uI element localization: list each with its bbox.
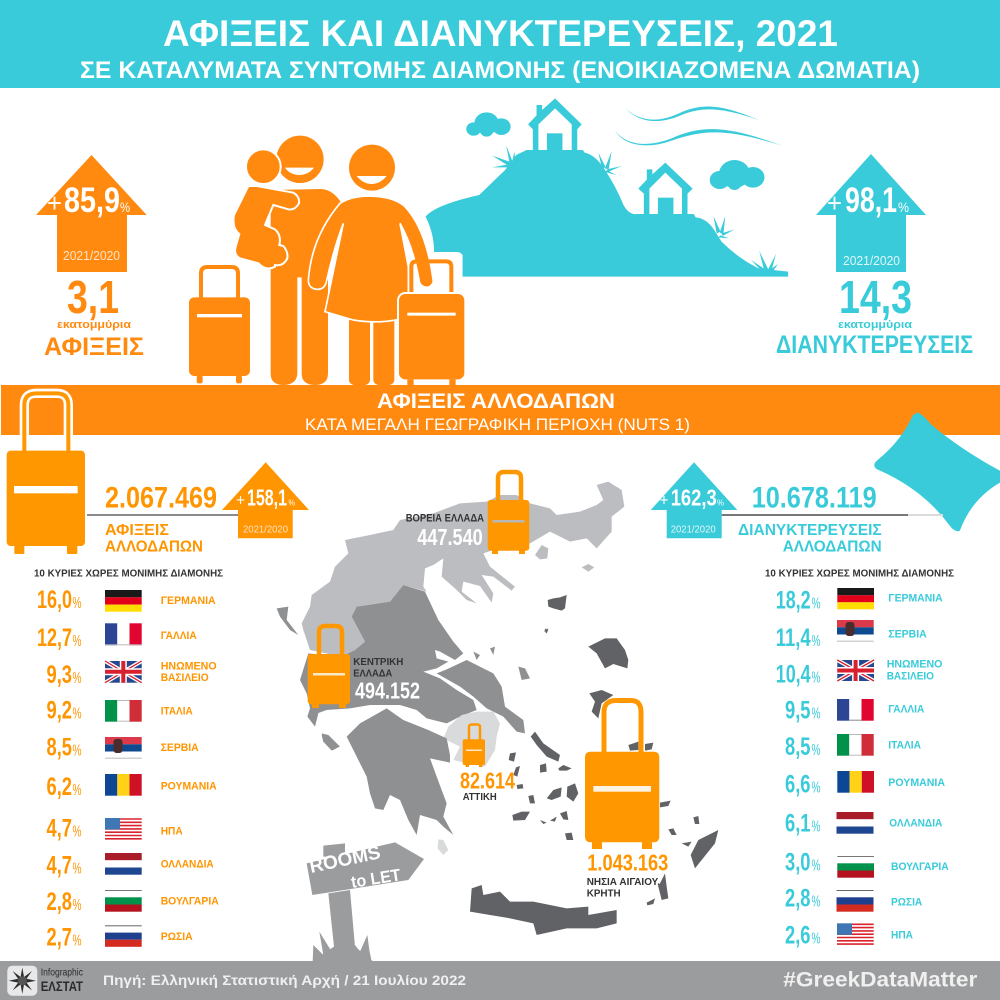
region label: Aegean islands and Crete: ΝΗΣΙΑ ΑΙΓΑΙΟΥ, [587, 876, 660, 888]
region label: central Greece [308, 626, 420, 708]
region label: northern Greece: ΒΟΡΕΙΑ ΕΛΛΑΔΑ [406, 513, 484, 525]
band: foreign arrivals heading [1, 385, 1000, 435]
row: Netherlands [46, 851, 214, 879]
icon: large suitcase [7, 393, 85, 554]
row: Germany: 18,2 [776, 586, 811, 614]
icon: upper house [528, 98, 582, 151]
row: Netherlands: 6,1 [785, 810, 811, 838]
row: Serbia: 11,4 [776, 624, 811, 652]
band: foreign arrivals heading: ΑΦΙΞΕΙΣ ΑΛΛΟΔΑΠΩΝ [377, 390, 615, 413]
arrow: foreign overnight stays change: 162,3 [671, 485, 717, 511]
row: France: ΓΑΛΛΙΑ [161, 630, 197, 642]
row: Romania [46, 773, 217, 801]
row: Italy: ΙΤΑΛΙΑ [161, 705, 193, 717]
row: Romania: ΡΟΥΜΑΝΙΑ [888, 777, 945, 789]
arrivals figure: 3,1 [67, 271, 119, 323]
icon: small cloud [466, 112, 511, 137]
row: USA [785, 921, 913, 949]
row: Bulgaria: 2,8 [46, 888, 72, 916]
row: USA: % [812, 930, 820, 947]
map regions upper [277, 482, 628, 750]
row: Romania: ΡΟΥΜΑΝΙΑ [161, 780, 217, 792]
illustration: hills with houses [426, 98, 788, 277]
row: Romania: 6,2 [46, 773, 72, 801]
row: United Kingdom [46, 660, 217, 689]
signpost: rooms to let: to LET [350, 865, 403, 892]
icon: suitcase central [308, 626, 350, 708]
row: United Kingdom: 10,4 [776, 661, 811, 689]
row: Russia: ΡΩΣΙΑ [891, 897, 922, 909]
arrivals label: ΑΦΙΞΕΙΣ [44, 333, 144, 361]
icon: grass tufts [492, 145, 778, 272]
arrow: foreign overnight stays change: 2021/2020 [671, 524, 716, 536]
icon: left suitcase [189, 267, 250, 383]
row: United Kingdom: ΗΝΩΜΕΝΟ [887, 658, 943, 670]
row: Bulgaria: ΒΟΥΛΓΑΡΙΑ [891, 861, 949, 873]
arrow: arrivals change [36, 155, 147, 272]
arrivals unit: εκατομμύρια [57, 319, 131, 331]
arrow: foreign arrivals change: 158,1 [247, 485, 287, 511]
subtitle: ΣΕ ΚΑΤΑΛΥΜΑΤΑ ΣΥΝΤΟΜΗΣ ΔΙΑΜΟΝΗΣ (ΕΝΟΙΚΙΑΖΟΜΕΝΑ ΔΩΜΑΤΙΑ) [80, 57, 920, 84]
foreign arrivals label: ΑΛΛΟΔΑΠΩΝ [105, 539, 203, 556]
row: Germany: % [812, 595, 820, 612]
region: Peloponnese [347, 708, 453, 835]
row: France: 9,5 [785, 696, 811, 724]
logo wordmark: Infographic [41, 968, 83, 979]
row: USA [46, 815, 183, 843]
title: ΑΦΙΞΕΙΣ ΚΑΙ ΔΙΑΝΥΚΤΕΡΕΥΣΕΙΣ, 2021 [163, 13, 838, 54]
row: France: ΓΑΛΛΙΑ [888, 704, 924, 716]
arrow: arrivals change: 2021/2020 [63, 248, 120, 263]
row: Russia [46, 924, 193, 952]
row: Italy: % [72, 705, 82, 722]
foreign overnight stays label [738, 522, 882, 556]
region: Kythira [438, 839, 448, 855]
row: Bulgaria [785, 849, 949, 878]
region label: central Greece: ΕΛΛΑΔΑ [353, 668, 393, 680]
icon: suitcase Aegean [585, 700, 659, 849]
row: Bulgaria: ΒΟΥΛΓΑΡΙΑ [161, 895, 219, 907]
row: United Kingdom: ΒΑΣΙΛΕΙΟ [887, 670, 934, 682]
arrow: arrivals change: 85,9 [64, 181, 120, 220]
icon: lower house [638, 163, 693, 215]
arrow: overnight stays change: + [827, 188, 842, 218]
row: France [37, 623, 197, 652]
arrow: foreign arrivals change: 2021/2020 [243, 524, 288, 536]
foreign arrivals label [105, 522, 203, 556]
arrow: arrivals change: + [47, 188, 62, 218]
region: Evia [437, 660, 525, 733]
arrow: arrivals change: % [120, 199, 130, 215]
icon: pillow [875, 413, 1000, 531]
row: Germany: ΓΕΡΜΑΝΙΑ [888, 593, 943, 605]
row: Russia [785, 885, 922, 913]
row: Serbia: ΣΕΡΒΙΑ [888, 628, 927, 640]
arrow: overnight stays change [816, 154, 926, 272]
icon: suitcase north [488, 472, 529, 554]
panel: foreign overnight stays [651, 462, 954, 580]
icon: right suitcase [398, 261, 465, 385]
region label: central Greece: ΚΕΝΤΡΙΚΗ [353, 656, 403, 668]
region label: Attica: ΑΤΤΙΚΗ [463, 792, 497, 803]
row: Russia: % [72, 933, 82, 950]
overnight stays unit: εκατομμύρια [838, 319, 912, 331]
foreign overnight stays label: ΔΙΑΝΥΚΤΕΡΕΥΣΕΙΣ [738, 522, 882, 539]
region: Aegean islands [509, 690, 718, 905]
arrow: foreign overnight stays change: + [660, 491, 669, 510]
row: Bulgaria: % [72, 897, 82, 914]
row: United Kingdom: % [812, 670, 820, 687]
region: northern islands [535, 545, 594, 572]
map regions lower [322, 690, 718, 935]
region: Lemnos [548, 595, 567, 611]
panel: foreign arrivals [7, 393, 309, 580]
row: Bulgaria: 3,0 [785, 849, 810, 877]
row: France: 12,7 [37, 624, 72, 652]
row: Italy: ΙΤΑΛΙΑ [888, 739, 921, 751]
region: Crete [470, 885, 617, 935]
region: central Greece [300, 585, 477, 723]
source: Πηγή: Ελληνική Στατιστική Αρχή / 21 Ιουλίου 2022 [103, 972, 466, 988]
panel: total overnight stays [776, 154, 973, 359]
row: Russia: 2,8 [785, 885, 811, 913]
hill silhouette [426, 150, 788, 277]
row: Romania: % [72, 782, 82, 799]
row: Italy [785, 733, 921, 761]
region: Ionian and Sporades islands [277, 607, 548, 750]
list heading: 10 ΚΥΡΙΕΣ ΧΩΡΕΣ ΜΟΝΙΜΗΣ ΔΙΑΜΟΝΗΣ [34, 569, 223, 580]
row: Romania: 6,6 [785, 771, 810, 799]
row: France [785, 696, 924, 724]
row: Germany: % [72, 595, 82, 612]
row: Netherlands [785, 810, 942, 838]
row: Germany: 16,0 [37, 586, 72, 614]
arrow: foreign overnight stays change: % [717, 499, 724, 508]
row: Italy [46, 696, 193, 724]
signpost: rooms to let [307, 842, 424, 962]
row: USA: ΗΠΑ [891, 929, 913, 941]
arrow: foreign arrivals change: % [288, 499, 295, 508]
row: Bulgaria: % [812, 858, 820, 875]
row: Serbia: ΣΕΡΒΙΑ [161, 742, 199, 754]
region: Attica [443, 712, 500, 767]
row: Bulgaria [46, 888, 219, 916]
row: Russia: ΡΩΣΙΑ [161, 931, 193, 943]
signpost: rooms to let: ROOMS [308, 842, 382, 878]
arrow: foreign overnight stays change [651, 462, 737, 538]
region label: Attica [460, 724, 515, 803]
icon: child [233, 149, 299, 269]
icon: father [271, 136, 342, 385]
row: Netherlands: % [72, 860, 82, 877]
header banner [0, 0, 1000, 88]
region label: central Greece: 494.152 [355, 677, 420, 703]
region label: Aegean islands and Crete: ΚΡΗΤΗ [587, 888, 621, 900]
row: Serbia: % [812, 633, 820, 650]
foreign arrivals figure: 2.067.469 [105, 482, 217, 515]
row: United Kingdom: % [72, 670, 82, 687]
region label: northern Greece [406, 472, 529, 554]
illustration: family with suitcases [189, 136, 465, 385]
row: Netherlands: ΟΛΛΑΝΔΙΑ [889, 818, 942, 830]
icon: wind lines [615, 107, 783, 146]
arrow: overnight stays change: 98,1 [845, 181, 897, 220]
overnight stays figure: 14,3 [839, 271, 912, 323]
row: Netherlands: 4,7 [46, 851, 72, 879]
panel: total arrivals [36, 155, 147, 361]
row: France: % [812, 705, 820, 722]
row: Italy: 9,2 [46, 696, 72, 724]
logo wordmark: ΕΛΣΤΑΤ [41, 978, 83, 994]
row: United Kingdom: 9,3 [46, 661, 72, 689]
region: Zakynthos [322, 735, 337, 751]
logo wordmark [41, 968, 83, 994]
row: United Kingdom [776, 658, 943, 689]
row: Serbia [776, 620, 927, 652]
list: overnight stays by country [776, 586, 949, 949]
row: Serbia: 8,5 [46, 734, 72, 762]
map of Greece [277, 482, 718, 935]
region: northern Greece [302, 482, 624, 657]
region: Lesvos and small islands [545, 628, 628, 668]
row: Serbia: % [72, 743, 82, 760]
region label: northern Greece: 447.540 [417, 524, 483, 550]
row: USA: 4,7 [46, 815, 72, 843]
row: Romania: % [812, 780, 820, 797]
row: Serbia [46, 734, 199, 762]
region label: Aegean islands and Crete [585, 700, 668, 900]
list: arrivals by country [37, 586, 219, 952]
row: Russia: % [812, 894, 820, 911]
row: Netherlands: % [812, 819, 820, 836]
region label: Attica: 82.614 [460, 767, 515, 793]
list heading: 10 ΚΥΡΙΕΣ ΧΩΡΕΣ ΜΟΝΙΜΗΣ ΔΙΑΜΟΝΗΣ [765, 569, 954, 580]
foreign overnight stays figure: 10.678.119 [752, 482, 877, 515]
arrow: overnight stays change: 2021/2020 [843, 253, 900, 268]
row: France: % [72, 633, 82, 650]
icon: mother [308, 145, 433, 385]
row: Russia: 2,7 [46, 924, 72, 952]
row: Germany [776, 586, 943, 614]
row: Romania [785, 771, 945, 799]
footer bar [0, 961, 1000, 1000]
row: United Kingdom: ΒΑΣΙΛΕΙΟ [161, 672, 209, 684]
row: USA: 2,6 [785, 921, 810, 949]
icon: large cloud [710, 160, 764, 190]
row: Italy: 8,5 [785, 733, 811, 761]
hashtag: #GreekDataMatter [783, 969, 977, 992]
arrow: overnight stays change: % [898, 199, 909, 215]
arrow: foreign arrivals change: + [236, 491, 245, 510]
row: Germany: ΓΕΡΜΑΝΙΑ [161, 595, 216, 607]
row: Italy: % [812, 742, 820, 759]
icon: logo [7, 966, 37, 996]
foreign overnight stays label: ΑΛΛΟΔΑΠΩΝ [783, 539, 882, 556]
row: Germany [37, 586, 216, 614]
foreign arrivals label: ΑΦΙΞΕΙΣ [105, 522, 169, 539]
band: foreign arrivals heading: ΚΑΤΑ ΜΕΓΑΛΗ ΓΕΩΓΡΑΦΙΚΗ ΠΕΡΙΟΧΗ (NUTS 1) [305, 415, 690, 434]
row: Netherlands: ΟΛΛΑΝΔΙΑ [161, 859, 214, 871]
region label: Aegean islands and Crete: 1.043.163 [587, 850, 668, 876]
row: USA: % [72, 824, 82, 841]
icon: suitcase Attica [463, 724, 485, 767]
row: USA: ΗΠΑ [161, 825, 183, 837]
row: United Kingdom: ΗΝΩΜΕΝΟ [161, 660, 217, 672]
arrow: foreign arrivals change [222, 462, 309, 538]
